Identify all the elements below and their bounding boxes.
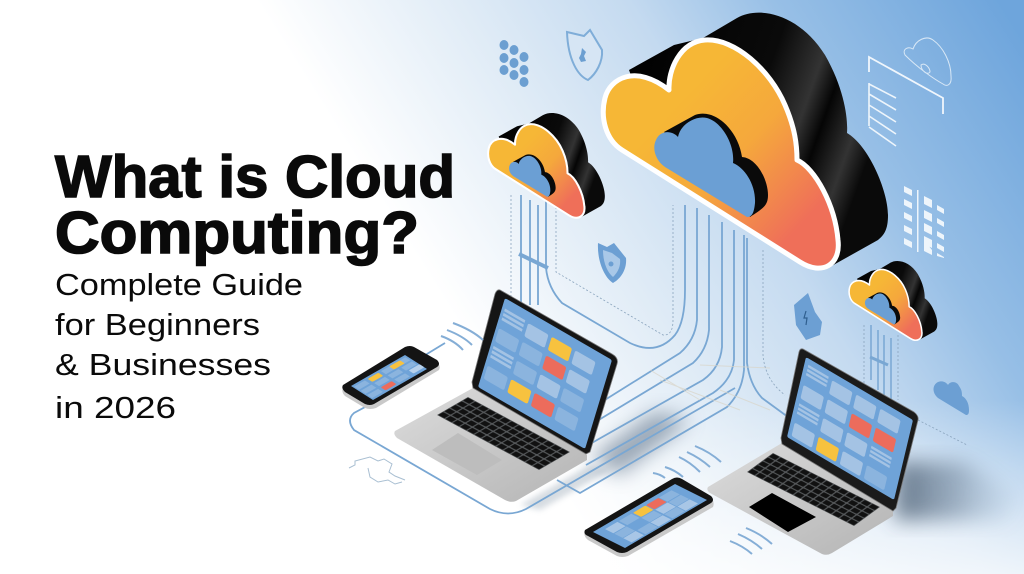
phone body bottom [584, 480, 714, 557]
signal waves right laptop [730, 528, 772, 554]
faint circuit trace [349, 457, 405, 484]
right laptop [707, 349, 918, 555]
left phone [342, 346, 440, 409]
laptop base right [707, 443, 893, 555]
phone body left [342, 348, 440, 409]
laptop floor shadows [520, 412, 1018, 520]
signal waves bottom phone [653, 446, 721, 478]
laptop lid right [781, 349, 918, 511]
title: What is Cloud [55, 144, 455, 210]
icon: small blue cloud [934, 381, 969, 415]
screen right [787, 357, 913, 500]
icon: white data grid [904, 186, 944, 258]
icon: small cloud right [849, 261, 937, 340]
icon: small cloud left [488, 113, 605, 218]
bottom phone [584, 478, 714, 557]
subtitle: Complete Guide [55, 267, 303, 302]
phone screen left [351, 355, 427, 400]
phone screen bottom [593, 484, 707, 548]
title [55, 144, 455, 266]
dotted guide lines [511, 195, 967, 445]
signal waves left phone [441, 323, 483, 350]
trackpad right [749, 493, 816, 532]
laptop base left [394, 388, 587, 502]
icon: shield top [567, 30, 602, 80]
faint beige traces [650, 365, 770, 410]
icon: dot grid [500, 40, 528, 87]
keyboard right [747, 453, 880, 526]
keyboard left [437, 397, 570, 470]
connection lines from left small cloud [519, 195, 548, 305]
connector node right [870, 357, 888, 365]
subtitle: for Beginners [55, 307, 260, 342]
trackpad left [432, 433, 502, 475]
subtitle: & Businesses [55, 347, 271, 382]
connection lines from right small cloud [870, 325, 891, 400]
icon: white outline frame [869, 57, 943, 114]
connector node left [519, 254, 548, 268]
subtitle: in 2026 [55, 390, 176, 425]
connection lines from big cloud [350, 195, 788, 514]
icon: big cloud [603, 13, 888, 268]
laptop lid left [472, 290, 617, 454]
icon: white list lines [869, 83, 896, 146]
icon: white outline cloud [904, 38, 951, 85]
screen left [478, 298, 612, 449]
icon: shield right [794, 293, 822, 340]
icon: shield middle [598, 243, 626, 283]
bottom fade [0, 400, 1024, 574]
title: Computing? [55, 200, 419, 266]
subtitle [55, 267, 303, 425]
left laptop [394, 290, 617, 502]
